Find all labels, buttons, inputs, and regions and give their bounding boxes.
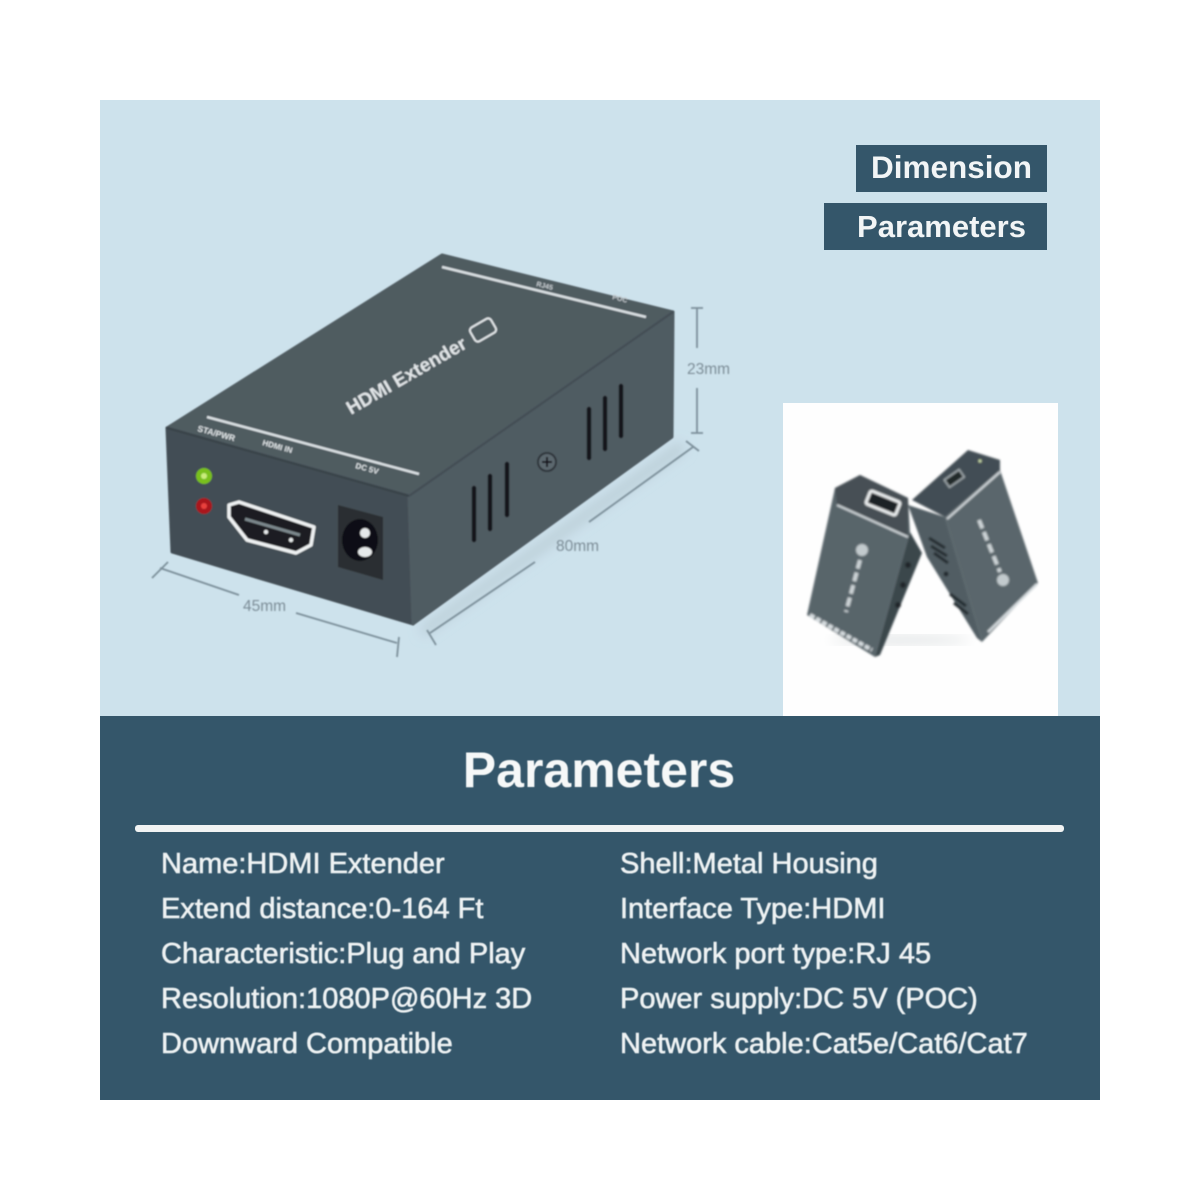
product image: HDMI extender with dimensions: HDMI Extender [343, 333, 471, 419]
product image: HDMI extender with dimensions: POC [612, 294, 628, 305]
spec list left: Characteristic:Plug and Play [161, 938, 525, 970]
product image: HDMI extender with dimensions: RJ45 [536, 281, 554, 292]
dimension labels: 80mm [556, 538, 599, 555]
top stripes [207, 417, 419, 474]
dimension labels: 45mm [243, 598, 286, 615]
spec list left: Downward Compatible [161, 1028, 453, 1060]
printed labels: STA/PWR [196, 423, 236, 443]
spec list right: Network port type:RJ 45 [620, 938, 931, 970]
dimension labels [243, 361, 730, 615]
product image: HDMI extender with dimensions: DC 5V [354, 461, 380, 476]
heading: Parameters tag [824, 203, 1047, 250]
spec list right [620, 848, 1028, 1060]
heading: Dimension [856, 145, 1047, 192]
spec list left: Name:HDMI Extender [161, 848, 445, 880]
spec list right: Power supply:DC 5V (POC) [620, 983, 978, 1015]
HDMI port [229, 502, 314, 553]
photo panel: two extenders [783, 403, 1058, 716]
dimension lines [152, 308, 703, 657]
right unit [912, 450, 1000, 517]
title: Parameters [463, 742, 735, 798]
spec list right: Network cable:Cat5e/Cat6/Cat7 [620, 1028, 1028, 1060]
LEDs [196, 468, 212, 484]
spec list right: Interface Type:HDMI [620, 893, 885, 925]
spec list right: Shell:Metal Housing [620, 848, 878, 880]
panel: dimension background [100, 100, 1100, 716]
heading: Dimension: Dimension [871, 149, 1032, 185]
screw [538, 453, 556, 471]
heading: Parameters tag: Parameters [857, 209, 1026, 244]
product image: HDMI extender with dimensions: HDMI IN [261, 438, 294, 455]
spec list left: Extend distance:0-164 Ft [161, 893, 483, 925]
dimension labels: 23mm [687, 361, 730, 378]
product image: HDMI extender with dimensions [151, 252, 730, 658]
DC jack [338, 505, 383, 580]
spec list left [161, 848, 532, 1060]
divider [135, 825, 1064, 832]
left unit [807, 475, 910, 657]
spec list left: Resolution:1080P@60Hz 3D [161, 983, 532, 1015]
side vents [474, 386, 621, 540]
panel: parameters [100, 716, 1100, 1100]
box faces [167, 255, 673, 496]
box shadow [420, 442, 686, 636]
